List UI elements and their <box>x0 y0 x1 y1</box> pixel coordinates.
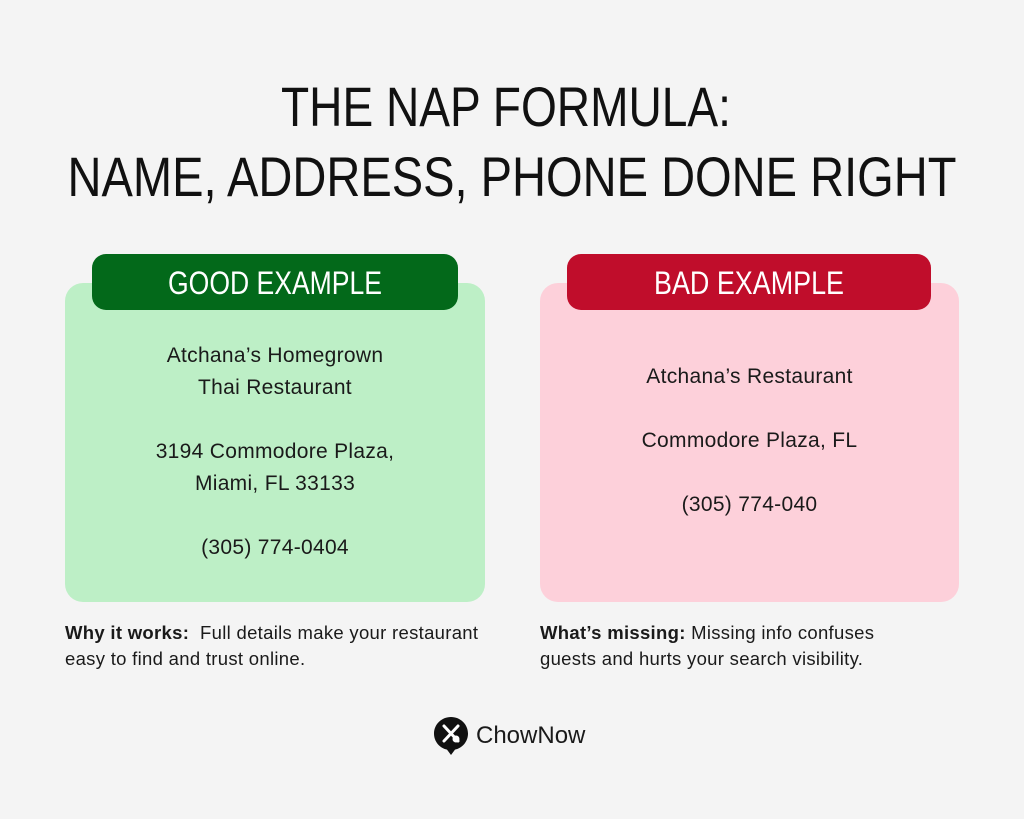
good example details: (305) 774-0404 <box>201 536 349 559</box>
heading: good example tab: GOOD EXAMPLE <box>168 265 382 301</box>
good example details: 3194 Commodore Plaza, <box>156 440 394 463</box>
good example details: Thai Restaurant <box>198 376 352 399</box>
panel: bad example <box>540 283 959 602</box>
logo: ChowNow: ChowNow <box>476 722 585 749</box>
title <box>68 75 956 208</box>
bad example details: (305) 774-040 <box>682 493 817 516</box>
bad example details: Commodore Plaza, FL <box>642 429 857 452</box>
heading: good example tab <box>92 254 458 310</box>
title: THE NAP FORMULA: <box>281 75 731 138</box>
text: what's missing: What’s missing: Missing info confuses <box>540 622 874 643</box>
good example details: Miami, FL 33133 <box>195 472 355 495</box>
text: why it works: easy to find and trust online. <box>65 648 305 669</box>
text: what's missing: guests and hurts your search visibility. <box>540 648 863 669</box>
text: why it works <box>65 622 478 669</box>
text: what's missing <box>540 622 874 669</box>
good example details <box>156 344 394 559</box>
bad example details <box>642 365 857 516</box>
heading: bad example tab <box>567 254 931 310</box>
logo: ChowNow <box>434 717 586 755</box>
good example details: Atchana’s Homegrown <box>167 344 383 367</box>
text: why it works: Why it works: Full details make your restaurant <box>65 622 478 643</box>
panel: good example <box>65 283 485 602</box>
icon: chownow pin <box>434 717 468 755</box>
bad example details: Atchana’s Restaurant <box>646 365 853 388</box>
heading: bad example tab: BAD EXAMPLE <box>654 265 844 301</box>
